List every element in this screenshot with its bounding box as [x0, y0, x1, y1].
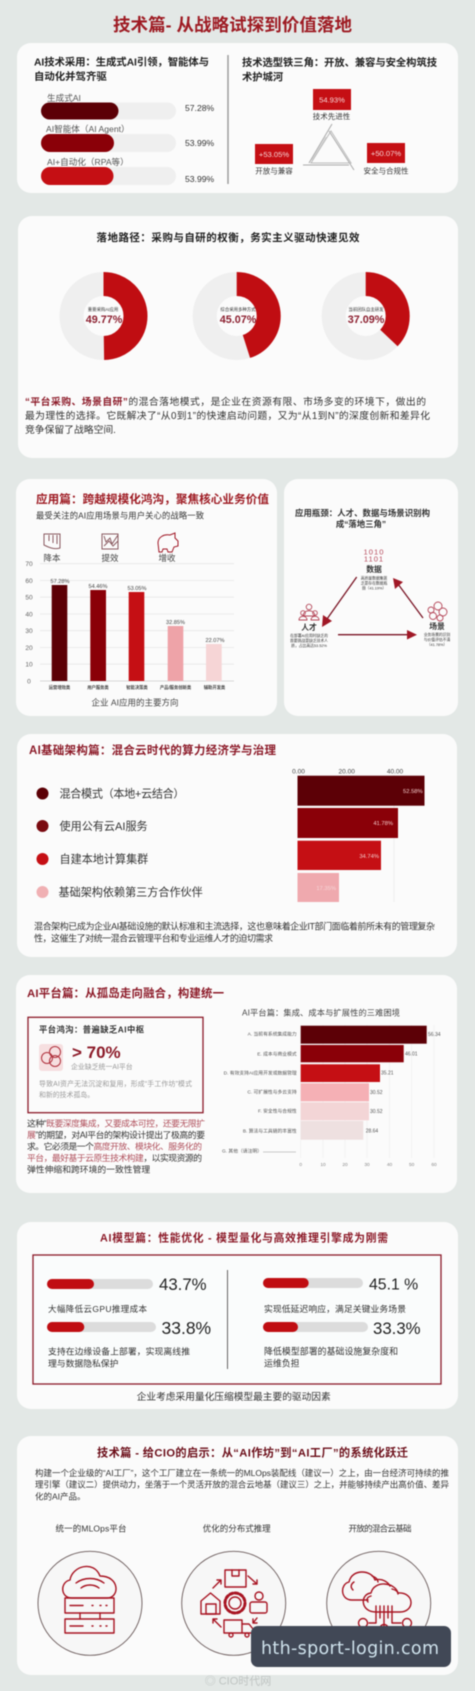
text block: platform requirements: 平台，最好基于云原生技术构建，以实现资源的	[27, 1153, 202, 1163]
label: cost reduction: 降本	[43, 553, 61, 563]
heading: deployment path: 落地路径：采购与自研的权衡，务实主义驱动快速见效	[96, 231, 360, 244]
metric: 33.3%: 33.3%	[373, 1319, 421, 1338]
horizontal bar chart: infrastructure modes: 20.00	[339, 768, 355, 776]
node: talent: 首要挑战是缺乏技术人	[290, 638, 328, 643]
heading: AI infrastructure: AI基础架构篇：混合云时代的算力经济学与治理	[29, 743, 276, 757]
bar chart: platform dilemmas: 40	[387, 1162, 392, 1168]
legend: 自建本地计算集群	[60, 852, 148, 866]
text block: hybrid architecture: 混合架构已成为企业AI基础设施的默认标准和主流选择，这也意味着企业IT部门面临着前所未有的管理复杂	[34, 920, 435, 932]
donut: 37.09%: 37.09%	[348, 314, 385, 326]
text block: AI factory: 构建一个企业级的“AI工厂”，这个工厂建立在一条统一的MLOps装配线（建议一）之上，由一台经济可持续的推	[35, 1468, 449, 1478]
callout: platform gap: 平台鸿沟：普遍缺乏AI中枢	[39, 1024, 145, 1034]
bar chart: main directions of enterprise AI applications: 54.46%	[89, 584, 108, 590]
bar chart: main directions of enterprise AI applications: 32.85%	[166, 620, 185, 626]
bar chart: main directions of enterprise AI applications: 22.07%	[206, 638, 225, 644]
bar chart: main directions of enterprise AI applications: 57.28%	[51, 579, 70, 585]
icon: cost reduction	[44, 534, 60, 549]
bar chart: main directions of enterprise AI applications: 产品/服务创新类	[160, 684, 192, 691]
bar chart: main directions of enterprise AI applications: 辅助开发类	[204, 684, 226, 691]
callout: openness and compatibility: 开放与兼容	[255, 166, 293, 176]
bar chart: main directions of enterprise AI applications: 50	[25, 594, 33, 602]
heading: application section: 应用篇：跨越规模化鸿沟，聚焦核心业务价值	[36, 492, 269, 506]
bar chart: main directions of enterprise AI applications: 10	[25, 662, 33, 668]
heading: application bottlenecks: 应用瓶颈：人才、数据与场景识别构	[295, 508, 430, 518]
bar chart: platform dilemmas: AI平台篇：集成、成本与扩展性的三难困境	[242, 1008, 400, 1018]
text block: hybrid architecture: 性，这催生了对统一混合云管理平台和专业运维人才的迫切需求	[34, 932, 273, 944]
icon: linked circles	[39, 1044, 63, 1071]
panel: application bottlenecks	[284, 479, 458, 716]
node: scenario: 业务场景的识别	[424, 632, 450, 637]
horizontal bar chart: infrastructure modes	[292, 768, 424, 902]
frame: model drivers	[33, 1255, 441, 1384]
heading: CIO takeaways: 技术篇 - 给CIO的启示：从“AI作坊”到“AI工厂”的系统化跃迁	[97, 1446, 408, 1460]
watermark label: hth-sport-login.com	[261, 1639, 439, 1659]
bar chart: main directions of enterprise AI applications: 0	[27, 678, 31, 686]
panel: AI model	[17, 1222, 458, 1409]
bar chart: platform dilemmas: C. 可扩展性与多云支持	[247, 1089, 297, 1096]
icon: logistics cycle	[201, 1570, 267, 1637]
legend: 混合模式（本地+云结合）	[60, 786, 184, 800]
bar: AI automation	[41, 156, 215, 185]
bar: AI agent: AI智能体（AI Agent）	[46, 123, 130, 134]
icon: revenue growth	[158, 533, 178, 552]
donut: 45.07%: 综合采用多种方式	[220, 306, 256, 313]
source mark: ◎ CIO时代网	[205, 1674, 271, 1688]
callout: technology advancement: 54.93%	[319, 96, 345, 104]
bar chart: main directions of enterprise AI applications	[25, 561, 234, 708]
node: data: 颈（41.19%）	[362, 586, 386, 590]
heading: technology selection triangle: 技术选型铁三角：开放、兼容与安全构筑技	[242, 56, 438, 69]
bar chart: platform dilemmas: A. 当前有系统集成能力	[248, 1031, 297, 1038]
bar chart: platform dilemmas: 30.52	[370, 1109, 383, 1115]
metric: 43.7%	[47, 1275, 207, 1314]
bar chart: main directions of enterprise AI applications: 用户服务类	[87, 684, 109, 691]
arrow: scenario to data	[393, 578, 423, 618]
bar: generative AI	[41, 92, 215, 120]
metric: 33.3%	[263, 1319, 421, 1368]
metric: 33.3%: 运维负担	[264, 1358, 300, 1368]
callout: openness and compatibility	[255, 144, 293, 176]
metric: 45.1%: 实现低延迟响应，满足关键业务场景	[264, 1303, 406, 1314]
donut: 49.77%: 重要采购AI应用	[88, 306, 118, 313]
node: data	[361, 548, 387, 590]
bar chart: main directions of enterprise AI applications: 40	[25, 612, 33, 618]
node: talent: 人才	[301, 622, 317, 632]
item: optimized distributed inference: 优化的分布式推理	[203, 1524, 271, 1534]
callout: security and compliance	[364, 143, 409, 176]
horizontal bar chart: infrastructure modes: 17.35%	[316, 886, 336, 892]
panel: AI technology adoption and selection	[17, 43, 458, 193]
bar: generative AI: 57.28%	[185, 103, 215, 113]
bar: generative AI: 生成式AI	[47, 92, 81, 103]
subheading: 最受关注的AI应用场景与用户关心的战略一致	[36, 510, 205, 520]
text block: platform requirements: 弹性伸缩和跨环境的一致性管理	[27, 1164, 150, 1174]
bar chart: platform dilemmas: 10	[320, 1162, 326, 1168]
donut: 49.77%	[72, 284, 136, 348]
metric: 45.1%	[263, 1276, 418, 1314]
node: data: 1101	[364, 554, 384, 564]
bar chart: main directions of enterprise AI applications: 智能决策类	[126, 684, 148, 691]
metric: 43.7%: 43.7%	[159, 1275, 207, 1294]
heading: technology selection triangle: 术护城河	[242, 70, 283, 84]
text block: AI factory: 理引擎（建议二）提供动力，坐落于一个灵活开放的混合云地基（建议三）之上，并能够持续产出高价值、差异	[35, 1480, 449, 1490]
item: open hybrid cloud foundation: 开放的混合云基础	[348, 1524, 412, 1534]
bar chart: platform dilemmas: F. 安全性与合规性	[258, 1108, 297, 1115]
bar chart: main directions of enterprise AI applications: 运营增效类	[49, 684, 71, 691]
node: scenario: 与价值评估不清	[424, 637, 450, 642]
item: unified MLOps platform: 统一的MLOps平台	[56, 1524, 126, 1534]
bar chart: platform dilemmas: 0	[299, 1162, 302, 1168]
callout: security and compliance: 安全与合规性	[364, 166, 409, 176]
bar chart: main directions of enterprise AI applications: 20	[25, 645, 33, 652]
heading: AI technology adoption: AI技术采用：生成式AI引领，智能体与	[34, 56, 209, 68]
heading: AI technology adoption: 自动化并驾齐驱	[34, 70, 107, 83]
bar chart: main directions of enterprise AI applications: 70	[25, 561, 33, 568]
bar chart: platform dilemmas: D. 有效支持AI应用开发或数据管理	[224, 1069, 297, 1076]
callout: platform gap: 和新的技术孤岛。	[39, 1090, 94, 1099]
item: unified MLOps platform	[38, 1524, 142, 1655]
panel: application chart	[16, 479, 277, 716]
item: open hybrid cloud foundation	[327, 1524, 431, 1655]
panel: CIO takeaways	[17, 1436, 458, 1675]
panel: AI platform	[16, 975, 457, 1193]
donut: 37.09%: 当前团队自主研发	[348, 306, 384, 313]
callout: platform gap	[28, 1017, 203, 1113]
horizontal bar chart: infrastructure modes: 0.00	[292, 768, 305, 776]
donut: 37.09%	[334, 284, 398, 348]
icon: efficiency	[102, 534, 118, 549]
icon: hybrid cloud	[343, 1572, 412, 1634]
bar chart: platform dilemmas: 56.34	[428, 1032, 441, 1038]
bar chart: platform dilemmas: 20	[342, 1162, 348, 1168]
text block: platform requirements: 这种“既要深度集成，又要成本可控，还要无限扩	[27, 1118, 205, 1128]
metric: 33.8%: 支持在边缘设备上部署，实现离线推	[48, 1346, 190, 1356]
callout: openness and compatibility: +53.05%	[259, 150, 289, 159]
node: talent: 质，占比高达53.52%	[291, 643, 327, 648]
callout: technology advancement	[313, 89, 351, 121]
arrow: data to talent	[322, 577, 357, 627]
node: data: 高质量数据集匮	[361, 576, 387, 580]
bar: AI agent	[41, 123, 215, 152]
callout: security and compliance: +50.07%	[371, 149, 401, 158]
panel: deployment path	[18, 216, 458, 458]
text block: platform requirements: 展”的期望，对AI平台的架构设计提出了极高的要	[27, 1130, 205, 1140]
bar chart: platform dilemmas: G. 其他（请注明）	[222, 1148, 262, 1155]
horizontal bar chart: infrastructure modes: 34.74%	[359, 854, 379, 860]
metric: 43.7%: 大幅降低云GPU推理成本	[48, 1304, 147, 1314]
bar chart: main directions of enterprise AI applications: 53.05%	[128, 586, 147, 592]
bar chart: platform dilemmas: B. 算法与工具链的丰富性	[243, 1128, 297, 1135]
callout: technology advancement: 技术先进性	[313, 111, 351, 121]
bar chart: platform dilemmas: 35.21	[381, 1070, 394, 1076]
label: revenue growth: 增收	[158, 553, 176, 563]
donut: 45.07%: 45.07%	[220, 314, 257, 326]
heading: AI model: AI模型篇：性能优化 - 模型量化与高效推理引擎成为刚需	[100, 1230, 388, 1244]
item: optimized distributed inference	[182, 1524, 286, 1655]
text block: hybrid deployment: 最为理性的选择。它既解决了“从0到1”的快速启动问题，又为“从1到N”的深度创新和差异化	[25, 409, 430, 422]
bar chart: platform dilemmas: 46.01	[405, 1052, 418, 1058]
bar chart: platform dilemmas: E. 成本与商业模式	[257, 1050, 297, 1057]
node: data: 1010	[364, 548, 384, 556]
callout: platform gap: 企业缺乏统一AI平台	[71, 1062, 133, 1071]
heading: AI platform: AI平台篇：从孤岛走向融合，构建统一	[27, 986, 224, 1000]
node: scenario: （41.78%）	[427, 642, 447, 647]
horizontal bar chart: infrastructure modes: 40.00	[387, 768, 404, 776]
triangle diagram	[303, 124, 354, 170]
bar chart: main directions of enterprise AI applications: 30	[25, 628, 33, 635]
legend	[36, 786, 203, 899]
bar chart: platform dilemmas	[222, 1008, 441, 1168]
node: data: 乏是存在数据瓶	[361, 580, 387, 586]
callout: platform gap: 导致AI资产无法沉淀和复用，形成“手工作坊”模式	[39, 1079, 192, 1088]
legend: 使用公有云AI服务	[60, 819, 148, 833]
node: scenario: 场景	[429, 621, 445, 631]
metric: 33.8%	[47, 1318, 211, 1368]
horizontal bar chart: infrastructure modes: 41.78%	[373, 821, 393, 827]
statistic: > 70%	[72, 1043, 121, 1062]
text block: hybrid deployment: “平台采购、场景自研”的混合落地模式，是企业在资源有限、市场多变的环境下，做出的	[25, 397, 426, 408]
donut: 49.77%: 49.77%	[86, 314, 123, 326]
metric: 33.3%: 降低模型部署的基础设施复杂度和	[264, 1346, 398, 1356]
node: scenario	[424, 602, 450, 647]
bar chart: platform dilemmas: 50	[409, 1162, 415, 1168]
label: efficiency: 提效	[101, 553, 119, 563]
bar chart: platform dilemmas: 30.52	[370, 1090, 383, 1096]
panel: AI infrastructure	[17, 734, 457, 957]
metric: 33.8%: 33.8%	[162, 1318, 211, 1338]
horizontal bar chart: infrastructure modes: 52.58%	[403, 789, 423, 795]
node: data: 数据	[366, 564, 382, 574]
metric: 45.1%: 45.1 %	[369, 1276, 418, 1294]
bar chart: main directions of enterprise AI applications: 企业 AI应用的主要方向	[92, 698, 178, 708]
donut: 45.07%	[205, 284, 269, 348]
title: 技术篇- 从战略试探到价值落地	[113, 15, 352, 35]
bar: AI agent: 53.99%	[185, 138, 215, 148]
arrow: talent to scenario	[338, 630, 417, 640]
node: talent	[290, 604, 328, 648]
text block: hybrid deployment: 竞争保留了战略空间.	[25, 423, 116, 436]
bar chart: platform dilemmas: 28.64	[366, 1128, 378, 1134]
heading: application bottlenecks: 成“落地三角”	[336, 519, 386, 529]
bar chart: platform dilemmas: 60	[431, 1162, 437, 1168]
bar: AI automation: 53.99%	[185, 174, 215, 184]
bar: AI automation: AI+自动化（RPA等）	[47, 156, 129, 167]
watermark label	[251, 1626, 451, 1667]
icon: cloud server	[63, 1566, 116, 1633]
legend: 基础架构依赖第三方合作伙伴	[58, 885, 203, 899]
text block: platform requirements: 求。它必须是一个高度开放、模块化、服务化的	[27, 1142, 202, 1152]
text block: AI factory: 化的AI产品。	[35, 1492, 86, 1502]
metric: 33.8%: 理与数据隐私保护	[48, 1358, 119, 1368]
node: talent: 在部署AI应用时缺乏的	[290, 633, 328, 638]
bar chart: platform dilemmas: 30	[364, 1162, 370, 1168]
bar chart: main directions of enterprise AI applications: 60	[25, 578, 33, 585]
caption: 企业考虑采用量化压缩模型最主要的驱动因素	[137, 1390, 331, 1403]
